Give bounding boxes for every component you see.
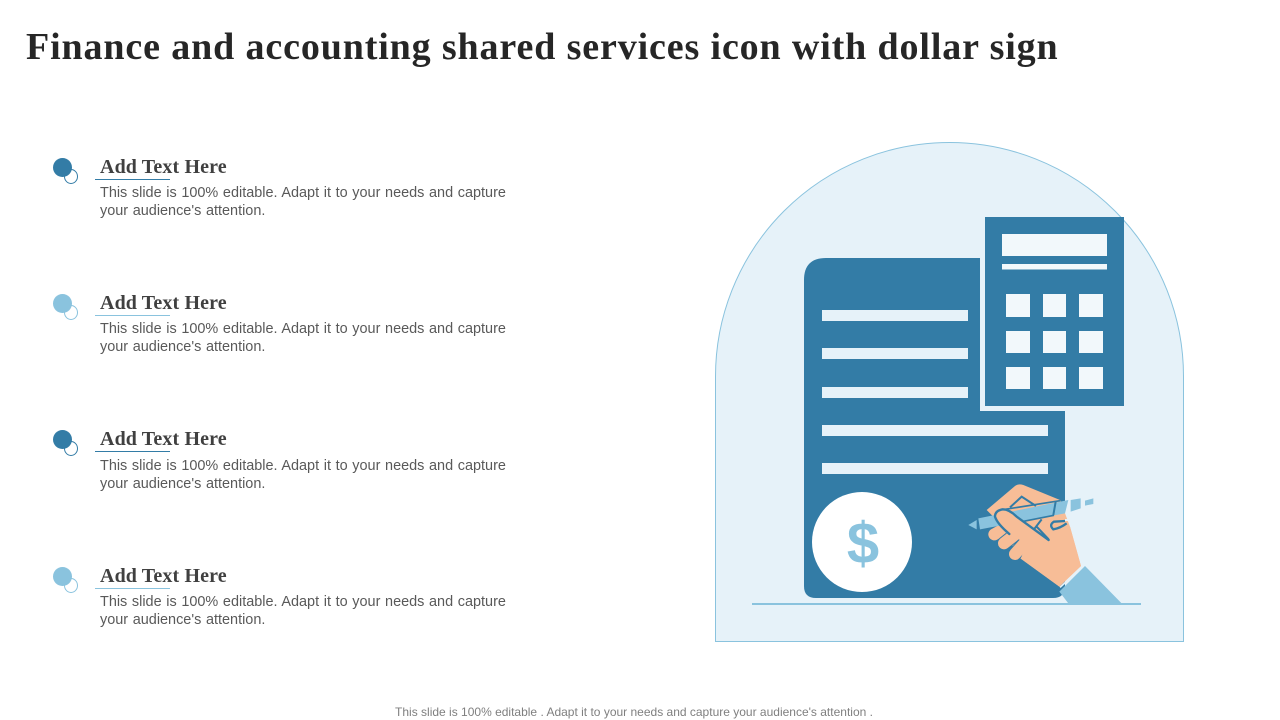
icon: hand holding pen xyxy=(968,484,1122,603)
pen body xyxy=(978,500,1068,529)
item 2 text xyxy=(100,321,506,355)
knuckle outline xyxy=(1010,497,1036,507)
item 4 text: your audience's attention. xyxy=(100,612,265,628)
item 3 text: This slide is 100% editable. Adapt it to your needs and capture xyxy=(100,458,506,474)
document text lines xyxy=(822,310,1048,474)
item 2 heading: Add Text Here xyxy=(100,292,227,314)
item 1 underline xyxy=(95,179,170,180)
item 3 heading: Add Text Here xyxy=(100,428,227,450)
footer note: This slide is 100% editable . Adapt it to your needs and capture your audience's attention . xyxy=(395,705,873,719)
item 1 text xyxy=(100,185,506,219)
thumb xyxy=(995,509,1047,548)
bullet icon 1 xyxy=(53,158,78,184)
item 2 text: This slide is 100% editable. Adapt it to your needs and capture xyxy=(100,321,506,337)
shirt sleeve xyxy=(1059,566,1122,603)
pen end dashes xyxy=(1071,498,1081,512)
arch background panel xyxy=(716,143,1184,642)
ground line xyxy=(752,603,1141,605)
bullet icon 3 xyxy=(53,430,78,456)
palm overlay xyxy=(1017,510,1081,587)
item 2 underline xyxy=(95,315,170,316)
grip lines xyxy=(1032,519,1049,539)
list item 2 xyxy=(53,292,506,355)
palm xyxy=(987,484,1081,587)
list item 1 xyxy=(53,156,506,219)
list item 4 xyxy=(53,565,506,628)
item 4 text xyxy=(100,594,506,628)
bullet icon 4 xyxy=(53,567,78,593)
icon: dollar coin xyxy=(812,492,912,592)
cuff gap xyxy=(1060,566,1083,587)
item 3 text xyxy=(100,458,506,492)
item 1 text: This slide is 100% editable. Adapt it to your needs and capture xyxy=(100,185,506,201)
item 3 underline xyxy=(95,451,170,452)
bullet icon 2 xyxy=(53,294,78,320)
icon: calculator xyxy=(985,217,1124,406)
item 1 text: your audience's attention. xyxy=(100,203,265,219)
calculator backing gap xyxy=(980,217,1124,411)
document xyxy=(804,217,1124,598)
item 4 text: This slide is 100% editable. Adapt it to your needs and capture xyxy=(100,594,506,610)
item 4 underline xyxy=(95,588,170,589)
title: Finance and accounting shared services icon with dollar sign xyxy=(26,26,1059,68)
item 3 text: your audience's attention. xyxy=(100,476,265,492)
pen tip xyxy=(968,520,977,529)
fingers xyxy=(994,527,1026,554)
pen clip xyxy=(1065,512,1077,520)
item 1 heading: Add Text Here xyxy=(100,156,227,178)
pen outline xyxy=(1005,501,1060,522)
icon: dollar coin: $ xyxy=(847,511,879,576)
item 4 heading: Add Text Here xyxy=(100,565,227,587)
pen band xyxy=(1053,502,1056,515)
list item 3 xyxy=(53,428,506,492)
item 2 text: your audience's attention. xyxy=(100,339,265,355)
